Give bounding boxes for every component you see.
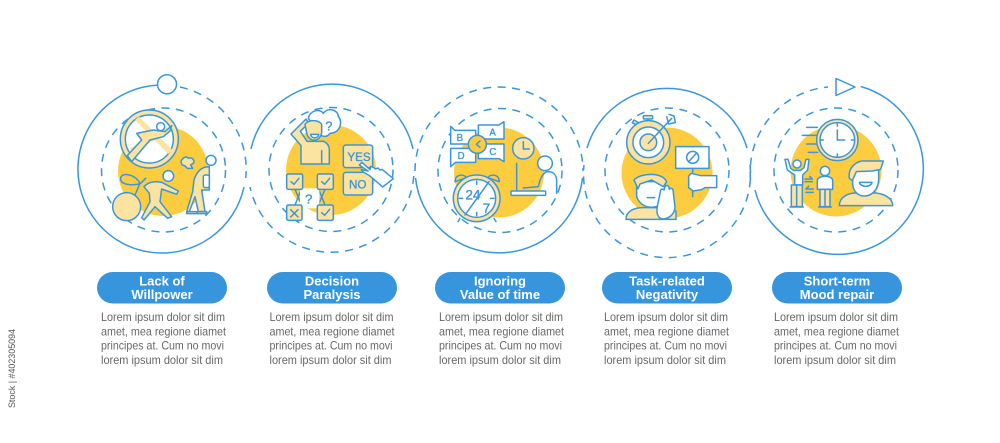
outer ring [250, 84, 414, 252]
label pill [97, 272, 227, 304]
label pill [435, 272, 565, 304]
label pill: Paralysis [303, 287, 361, 302]
icon: man dragging sack [113, 171, 178, 221]
label pill [772, 272, 902, 304]
label pill [267, 272, 397, 304]
body text: amet, mea regione diamet [270, 324, 395, 338]
body text: lorem ipsum dolor sit dim [439, 353, 561, 367]
inner dashed ring [605, 108, 729, 232]
icon: wall clock and laptop worker [511, 138, 557, 195]
panel: ignoring value of time [415, 87, 583, 367]
icon: option bubbles: D [458, 151, 465, 162]
label pill: Lack of [139, 274, 185, 288]
outer ring [584, 88, 750, 258]
panel: task-related negativity [584, 88, 750, 367]
body text [101, 310, 227, 367]
body text: principes at. Cum no movi [101, 338, 224, 352]
label pill: Willpower [131, 287, 193, 302]
icon: option bubbles: A [489, 128, 496, 139]
body text: Lorem ipsum dolor sit dim [774, 310, 898, 324]
body text: amet, mea regione diamet [439, 324, 565, 338]
icon: option bubbles: B [457, 133, 463, 144]
panel: decision paralysis [250, 84, 414, 367]
label pill: Negativity [636, 287, 699, 302]
label pill: Mood repair [800, 287, 874, 302]
body text: amet, mea regione diamet [101, 324, 227, 338]
body text: principes at. Cum no movi [439, 338, 562, 352]
icon: time options and alarm clock [451, 122, 557, 222]
inner dashed ring [774, 108, 898, 232]
icon: 24/7 alarm clock [453, 175, 500, 222]
inner dashed ring [102, 108, 226, 232]
panel: lack of willpower [78, 75, 246, 367]
icon: boy raising hand [626, 174, 676, 219]
body text: Lorem ipsum dolor sit dim [439, 310, 563, 324]
yellow disc [622, 128, 712, 218]
body text: principes at. Cum no movi [774, 338, 897, 352]
body text [439, 310, 565, 367]
outer ring with marker [78, 75, 246, 253]
icon: stopwatch target [627, 114, 675, 164]
icon: thinking person: ? [325, 120, 332, 134]
icon: target, sign and refusing boy [626, 114, 717, 219]
body text [604, 310, 730, 367]
icon: prohibition sign in hand [676, 147, 717, 197]
label pill: Ignoring [474, 274, 526, 288]
icon: yes and no buttons: NO [349, 178, 366, 191]
icon: wind-up person [181, 155, 216, 214]
icon: check boxes around question: ? [305, 191, 312, 206]
inner dashed ring [269, 108, 393, 232]
icon: no flying, tired people [113, 110, 216, 221]
icon: happy and sad figures [785, 159, 833, 207]
body text [774, 310, 900, 367]
yellow disc [286, 125, 376, 215]
outer ring with arrow [750, 78, 923, 254]
label pill: Short-term [804, 274, 870, 288]
icon: clock and mood change [785, 119, 893, 207]
body text: Lorem ipsum dolor sit dim [101, 310, 225, 324]
body text: lorem ipsum dolor sit dim [270, 353, 392, 367]
body text: Lorem ipsum dolor sit dim [604, 310, 728, 324]
icon: decision choices [287, 110, 393, 220]
icon: 24/7 alarm clock: 7 [483, 201, 490, 216]
yellow disc [790, 126, 882, 216]
icon: yes and no buttons [343, 145, 393, 195]
body text: amet, mea regione diamet [604, 324, 730, 338]
body text: lorem ipsum dolor sit dim [101, 353, 223, 367]
body text: lorem ipsum dolor sit dim [604, 353, 726, 367]
yellow disc [118, 126, 208, 216]
body text: Lorem ipsum dolor sit dim [270, 310, 394, 324]
icon: prohibited flight [120, 110, 178, 168]
body text: principes at. Cum no movi [270, 338, 392, 352]
panel: short-term mood repair [750, 78, 923, 367]
icon: 24/7 alarm clock: 24 [465, 188, 481, 203]
body text [270, 310, 395, 367]
label pill [602, 272, 732, 304]
stock id: Stock | #402305094 [7, 329, 18, 408]
body text: principes at. Cum no movi [604, 338, 727, 352]
icon: fast clock [802, 119, 858, 161]
icon: option bubbles: C [489, 147, 496, 158]
icon: option bubbles [451, 122, 504, 167]
yellow disc [454, 128, 544, 218]
icon: yes and no buttons: YES [347, 151, 371, 164]
inner dashed ring [438, 108, 562, 232]
icon: smiling man [839, 161, 893, 206]
label pill: Value of time [460, 287, 540, 302]
body text: amet, mea regione diamet [774, 324, 900, 338]
label pill: Task-related [629, 274, 705, 288]
body text: lorem ipsum dolor sit dim [774, 353, 896, 367]
outer ring [415, 87, 583, 253]
label pill: Decision [305, 274, 359, 288]
